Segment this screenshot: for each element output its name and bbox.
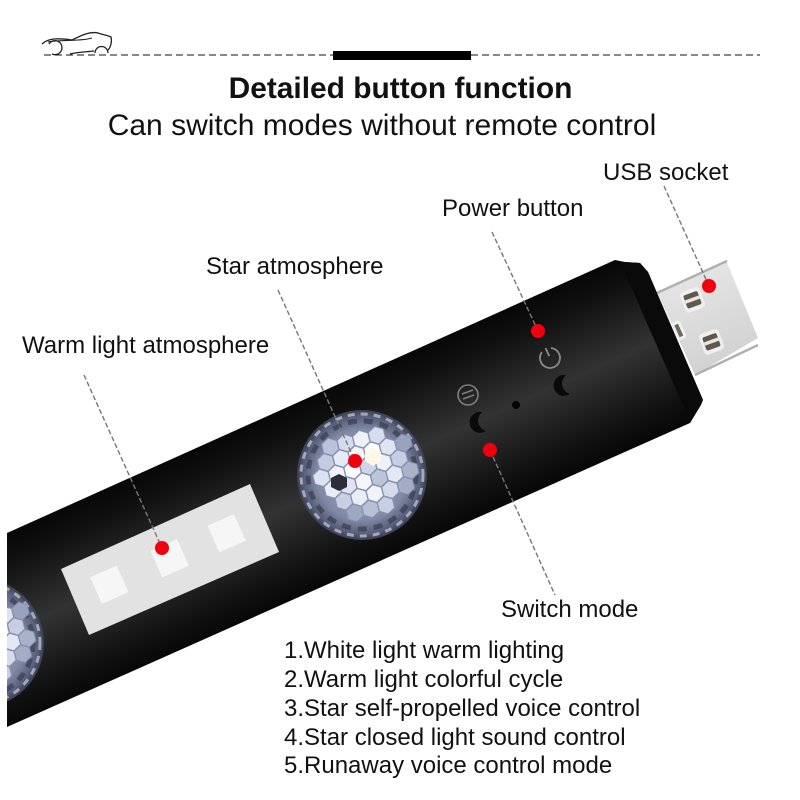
icon: power xyxy=(536,344,563,371)
icon: switch xyxy=(458,385,478,405)
icon: mic hole xyxy=(512,401,520,409)
label: USB socket: USB socket xyxy=(603,159,729,186)
mode list: 1.White light warm lighting xyxy=(284,637,564,664)
label: warm light atmosphere: Warm light atmosphere xyxy=(22,332,269,359)
leader: warm light xyxy=(84,375,169,555)
icon: moon power xyxy=(554,375,570,396)
subtitle: Can switch modes without remote control xyxy=(108,109,656,142)
leader: power button xyxy=(492,232,545,338)
leader: USB socket xyxy=(664,186,716,293)
label: switch mode: Switch mode xyxy=(501,596,638,623)
USB device xyxy=(0,260,758,727)
mode list: 3.Star self-propelled voice control xyxy=(284,695,640,722)
LED 2 xyxy=(151,539,189,577)
crystal ball xyxy=(297,410,427,540)
leader: switch mode xyxy=(483,443,555,595)
USB plug xyxy=(657,260,758,375)
second crystal ball xyxy=(7,584,44,702)
title: Detailed button function xyxy=(229,72,572,105)
icon: moon switch xyxy=(470,412,486,433)
LED 1 xyxy=(90,566,128,604)
mode list: 4.Star closed light sound control xyxy=(284,724,626,751)
black body xyxy=(7,260,703,727)
label: power button: Power button xyxy=(442,195,583,222)
mode list xyxy=(284,637,640,779)
mode list: 5.Runaway voice control mode xyxy=(284,752,612,779)
mode list: 2.Warm light colorful cycle xyxy=(284,666,563,693)
header divider xyxy=(44,51,760,60)
label: star atmosphere: Star atmosphere xyxy=(206,253,383,280)
icon: car logo xyxy=(42,33,111,55)
leader: star atmosphere xyxy=(278,290,362,468)
LED 3 xyxy=(208,514,246,552)
warm light panel xyxy=(61,484,279,635)
end cap xyxy=(622,262,703,423)
